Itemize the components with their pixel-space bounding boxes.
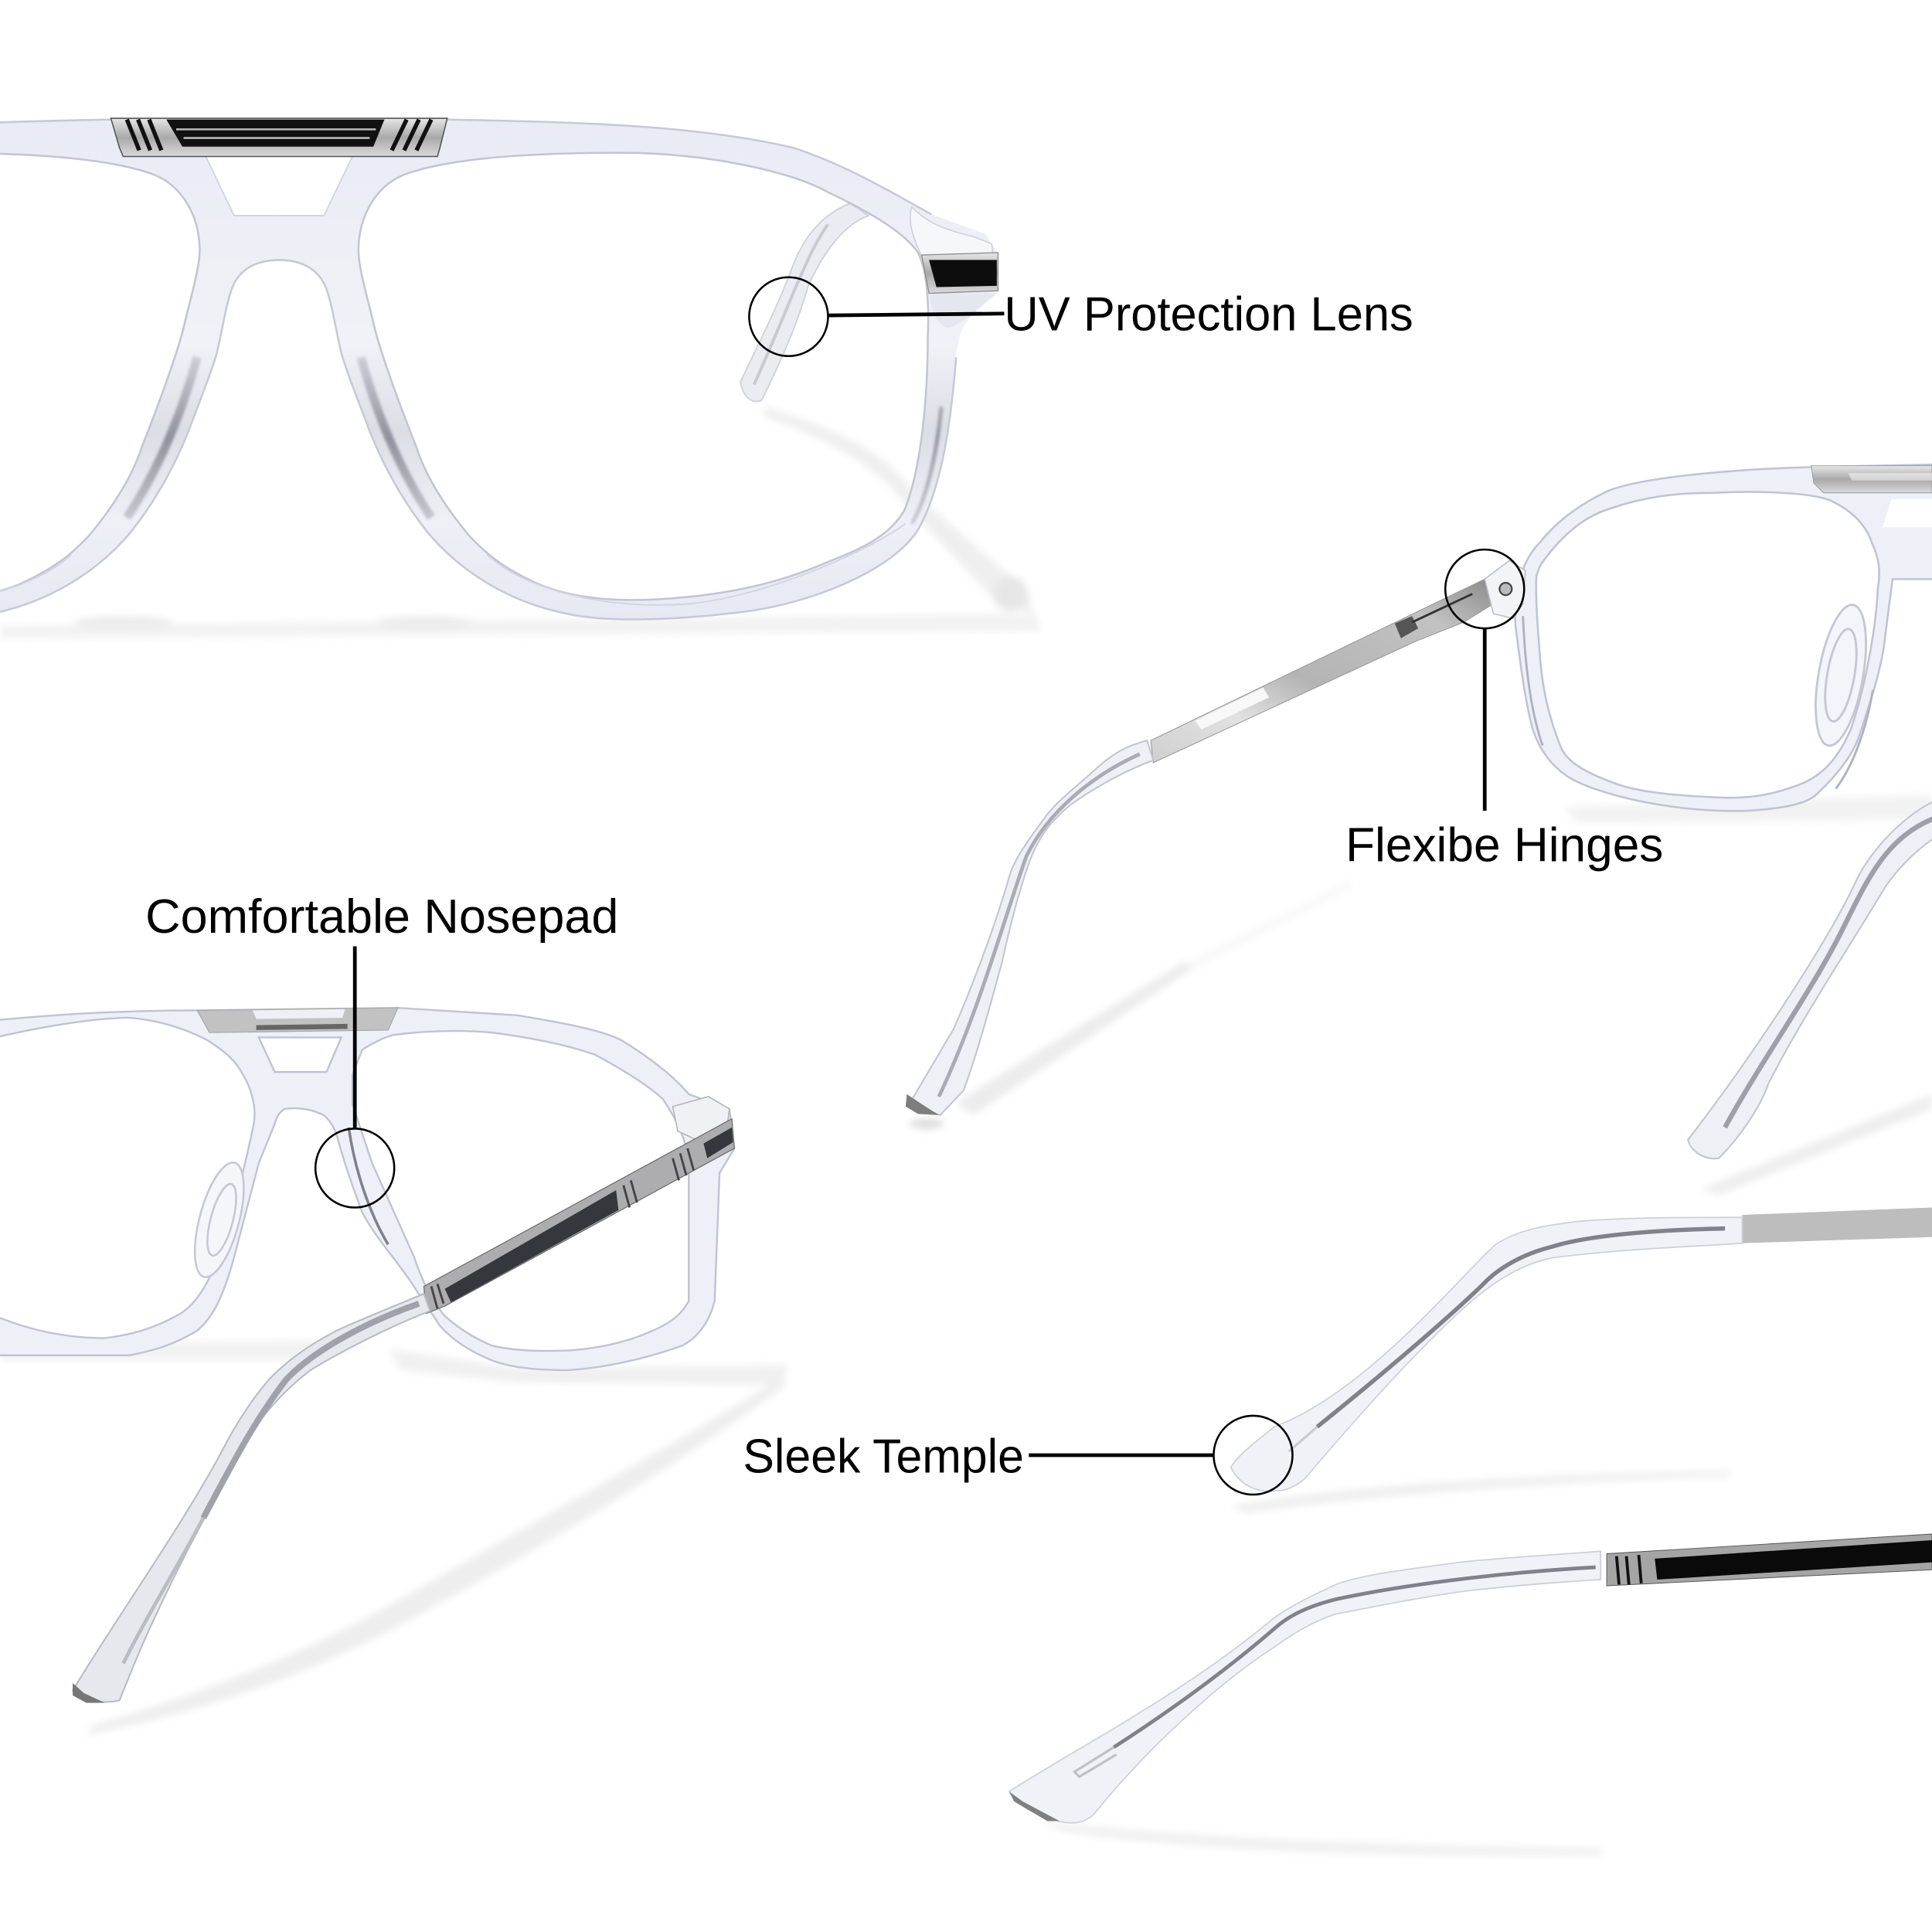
bridge metal plate xyxy=(111,118,447,156)
hinge screw xyxy=(1499,583,1512,595)
upper right temple arm xyxy=(1231,1207,1932,1513)
shadow xyxy=(1041,1821,1602,1856)
front frame xyxy=(0,1008,734,1370)
bridge metal xyxy=(1811,466,1932,493)
front frame halves xyxy=(278,120,998,619)
bottom left back view glasses xyxy=(0,1008,788,1735)
nose pad xyxy=(1807,601,1875,750)
lower right temple arm xyxy=(1009,1534,1932,1856)
top front view glasses xyxy=(0,118,1041,638)
callout: Flexibe Hinges xyxy=(1345,549,1663,872)
callout: Comfortable Nosepad xyxy=(145,890,618,1207)
shadow xyxy=(1231,1471,1730,1513)
shadows xyxy=(0,1341,788,1735)
temple behind the front xyxy=(740,203,869,401)
plastic temple xyxy=(73,1294,430,1702)
callout: Sleek Temple xyxy=(743,1416,1293,1495)
metal section xyxy=(1742,1207,1932,1243)
callout: Flexibe Hinges: Flexibe Hinges xyxy=(1345,818,1663,872)
metal temple arm xyxy=(423,1119,734,1314)
floor shadow xyxy=(0,406,1041,638)
metal temple arm xyxy=(1151,579,1493,763)
nose pad xyxy=(185,1158,253,1282)
metal section with black inlay xyxy=(1607,1534,1932,1586)
hinge block xyxy=(1485,560,1526,618)
bridge metal xyxy=(197,1008,398,1032)
front frame xyxy=(1515,464,1932,811)
callout: UV Protection Lens: UV Protection Lens xyxy=(1004,287,1413,341)
right side view glasses xyxy=(906,464,1932,1196)
plastic section xyxy=(1231,1217,1742,1492)
hinge block xyxy=(673,1097,730,1140)
plastic section xyxy=(1009,1551,1600,1823)
callout: UV Protection Lens xyxy=(749,277,1413,356)
far temple xyxy=(1688,801,1932,1158)
callout: Sleek Temple: Sleek Temple xyxy=(743,1430,1024,1483)
plastic temple tip xyxy=(906,740,1153,1115)
callout: Comfortable Nosepad: Comfortable Nosepad xyxy=(145,890,618,944)
end piece hinge xyxy=(922,253,998,293)
shadows xyxy=(910,794,1932,1196)
